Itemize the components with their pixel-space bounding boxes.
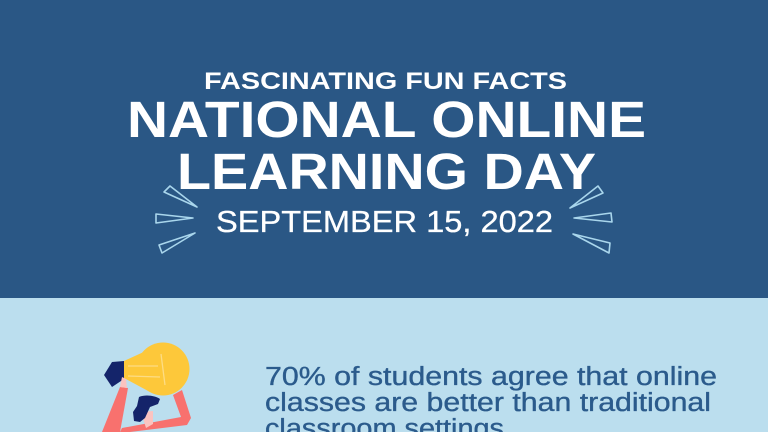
text block: online class statistic: classes are better than traditional	[265, 389, 711, 417]
icon: left burst lines	[156, 186, 197, 253]
title: national online learning day: LEARNING DAY	[177, 143, 596, 200]
text block: online class statistic: 70% of students agree that online	[265, 363, 717, 391]
panel: header background	[0, 0, 768, 298]
icon: person holding light bulb	[102, 342, 191, 432]
heading: fascinating fun facts: FASCINATING FUN FACTS	[204, 68, 567, 95]
icon: right burst lines	[570, 186, 612, 253]
panel: light blue content background	[0, 298, 768, 432]
title: national online learning day: NATIONAL ONLINE	[127, 91, 646, 148]
date: september 15, 2022: SEPTEMBER 15, 2022	[216, 205, 553, 239]
title: national online learning day	[127, 91, 646, 200]
text block: online class statistic	[265, 363, 717, 432]
